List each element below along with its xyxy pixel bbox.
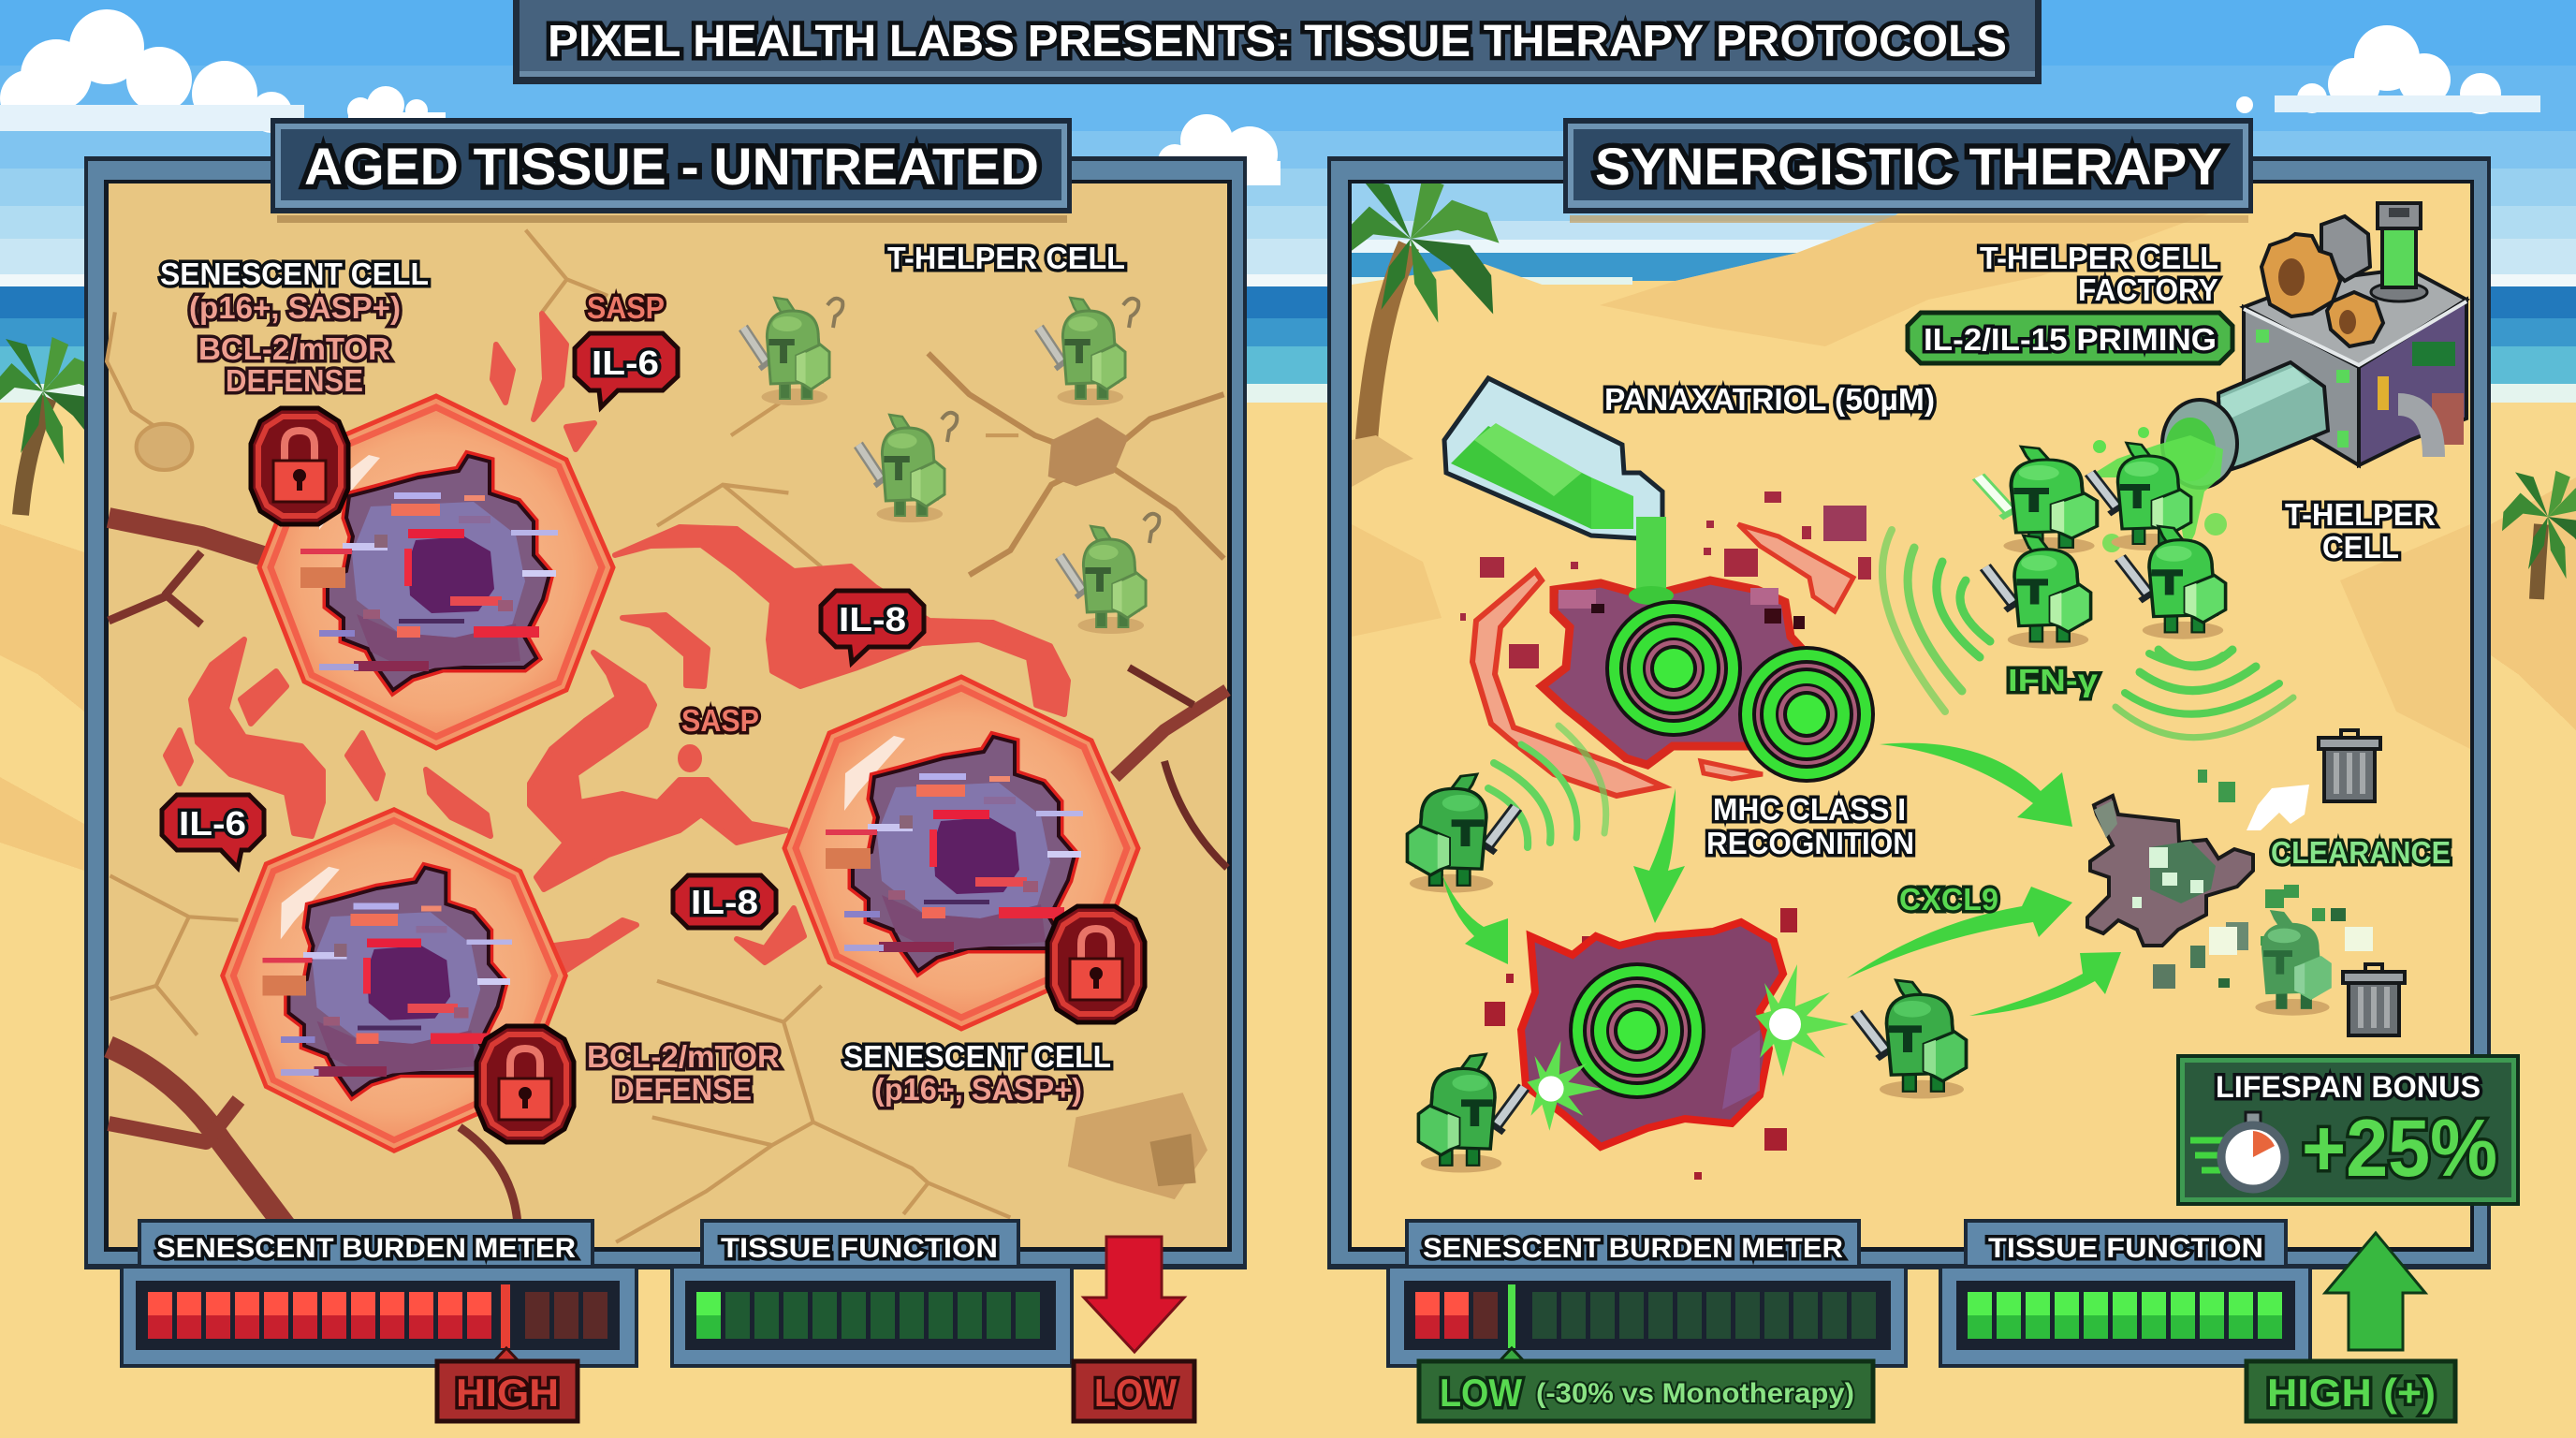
callout: lifespan bonus: +25% [2302, 1104, 2497, 1194]
dune [1352, 183, 2470, 1247]
knight E with sword right [1407, 774, 1516, 893]
meter: senescent burden, untreated: SENESCENT BURDEN METER [156, 1233, 576, 1264]
label: T-helper cell factory [1980, 241, 2218, 307]
dune shading [1352, 213, 2470, 749]
callout: lifespan bonus: LIFESPAN BONUS [2216, 1070, 2481, 1104]
grey machine part [2321, 216, 2370, 281]
label: IL-2/IL-15 priming: IL-2/IL-15 PRIMING [1924, 322, 2217, 357]
label: clearance: CLEARANCE [2271, 835, 2451, 870]
green serum tube [2371, 203, 2427, 301]
label: SASP top: SASP [587, 290, 665, 325]
arrow: knight to lower cell [1442, 875, 1508, 964]
icon: trash can lower [2343, 964, 2405, 1035]
arrow: function down [1084, 1237, 1184, 1352]
meter: tissue function, untreated [670, 1219, 1074, 1368]
label: CXCL9: CXCL9 [1899, 882, 1998, 917]
heading: synergistic therapy [1563, 118, 2253, 223]
label: BCL-2/mTOR defense bottom [587, 1039, 780, 1107]
meter: senescent burden, untreated [120, 1219, 638, 1368]
icon: panaxatriol bottle [1444, 378, 1674, 605]
knight squad [1978, 443, 2226, 649]
callout: IL-8 lower: IL-8 [691, 883, 758, 921]
label: T-helper cell: T-HELPER CELL [887, 241, 1125, 275]
arrow: function up [2325, 1233, 2425, 1350]
MHC target marker lower [1569, 962, 1705, 1099]
label: senescent cell top: DEFENSE [226, 363, 363, 398]
knight F and impact burst [1418, 1041, 1602, 1172]
label: senescent cell top: SENESCENT CELL [160, 257, 429, 291]
callout: lifespan bonus [2176, 1054, 2520, 1206]
panel: synergistic therapy [1327, 156, 2491, 1269]
burden marker [501, 1284, 510, 1348]
callout: IL-8 upper: IL-8 [839, 600, 906, 638]
label: BCL-2/mTOR defense bottom: BCL-2/mTOR [587, 1039, 780, 1074]
blood vessels [109, 518, 1227, 1245]
meter: tissue function, therapy [1939, 1219, 2312, 1368]
label: senescent cell bottom: SENESCENT CELL [843, 1039, 1111, 1074]
label: senescent cell top: BCL-2/mTOR [198, 331, 390, 366]
lock: BCL-2/mTOR defense, cell 3 [1047, 906, 1145, 1022]
callout: IL-6 upper [575, 333, 678, 407]
waves from left knight [1488, 726, 1606, 847]
label: senescent cell top [160, 257, 429, 398]
burden segments [148, 1292, 607, 1339]
factory status lights [2256, 330, 2455, 448]
palm tree inside panel [1342, 176, 1500, 487]
label: MHC class I recognition: MHC CLASS I [1713, 792, 1906, 827]
senescent cell 1 [259, 396, 613, 748]
clouds [0, 9, 2540, 185]
gears [2261, 234, 2383, 346]
knight G and impact burst [1755, 964, 1966, 1099]
burden segments [1415, 1292, 1876, 1339]
callout: IL-6 upper: IL-6 [592, 344, 659, 382]
heading: aged tissue [271, 118, 1072, 223]
meter: senescent burden, therapy: SENESCENT BURDEN METER [1423, 1233, 1843, 1264]
lock: BCL-2/mTOR defense, cell 2 [476, 1026, 574, 1142]
label: BCL-2/mTOR defense bottom: DEFENSE [613, 1072, 752, 1107]
callout: IL-6 lower: IL-6 [179, 804, 246, 843]
burden marker [1508, 1284, 1515, 1348]
function segments [696, 1292, 1040, 1339]
badge: HIGH [437, 1348, 578, 1421]
callout: IL-6 lower [162, 795, 264, 868]
arrow: knight to clearance [1969, 952, 2121, 1016]
label: senescent cell bottom: (p16+, SASP+) [874, 1072, 1082, 1107]
heading: synergistic therapy: SYNERGISTIC THERAPY [1595, 137, 2222, 196]
SASP inflammatory flow [166, 314, 1068, 971]
senescent cell 3 [784, 677, 1138, 1029]
green serum cloud [2087, 427, 2227, 552]
badge: HIGH: HIGH [456, 1371, 559, 1415]
callout: IL-8 upper [821, 591, 924, 663]
side pipes [2432, 393, 2464, 445]
label: MHC class I recognition: RECOGNITION [1706, 826, 1914, 860]
badge: LOW red [1074, 1361, 1194, 1421]
label: T-helper cell: CELL [2322, 530, 2399, 565]
lock: BCL-2/mTOR defense, cell 1 [251, 408, 348, 524]
meter: senescent burden, therapy [1386, 1219, 1908, 1368]
idle T-helper knights [743, 298, 1159, 634]
title banner: PIXEL HEALTH LABS PRESENTS: TISSUE THERAPY PROTOCOLS [548, 17, 2007, 66]
badge: HIGH (+): HIGH (+) [2267, 1371, 2436, 1415]
damaged senescent cell lower [1521, 922, 1783, 1147]
title banner [513, 0, 2042, 84]
debris near lower cell [1485, 908, 1797, 1180]
icon: T-helper cell factory [2162, 203, 2466, 488]
callout: IL-8 lower [673, 875, 776, 928]
cracked tissue [107, 230, 1223, 1242]
badge: LOW red: LOW [1094, 1371, 1177, 1415]
meter: tissue function, therapy: TISSUE FUNCTION [1988, 1233, 2263, 1264]
label: MHC class I recognition [1706, 792, 1914, 860]
label: senescent cell bottom [843, 1039, 1111, 1107]
MHC target markers upper [1605, 600, 1875, 783]
label: T-helper cell factory: FACTORY [2078, 272, 2218, 307]
arrow: down to lower cell [1633, 788, 1685, 923]
panel: aged tissue, untreated [84, 156, 1247, 1269]
badge: HIGH (+) [2247, 1361, 2455, 1421]
label: T-helper cell: T-HELPER [2285, 497, 2436, 532]
badge: LOW -30% vs Monotherapy: (-30% vs Monotherapy) [1536, 1378, 1854, 1409]
badge: LOW -30% vs Monotherapy: LOW [1440, 1371, 1522, 1415]
panel frame [1327, 156, 2491, 1269]
heading: aged tissue: AGED TISSUE - UNTREATED [304, 137, 1039, 196]
label: T-helper cell [2285, 497, 2436, 565]
panel frame [84, 156, 1247, 1269]
dissolving knight [2234, 910, 2332, 1016]
senescent cell 2 [223, 810, 565, 1151]
icon: stopwatch [2190, 1112, 2285, 1189]
label: IFN-gamma: IFN-γ [2008, 663, 2099, 697]
badge: LOW -30% vs Monotherapy [1419, 1348, 1873, 1421]
arrow: to clearance upper [1880, 743, 2072, 827]
arrow: white clearance [2247, 785, 2309, 830]
icon: trash can upper [2319, 730, 2380, 801]
function segments [1968, 1292, 2282, 1339]
arrow: CXCL9 [1847, 887, 2072, 978]
label: Panaxatriol: PANAXATRIOL (50µM) [1604, 382, 1935, 417]
meter: tissue function, untreated: TISSUE FUNCTION [721, 1233, 998, 1264]
output pipe [2218, 362, 2328, 473]
palm tree: left shore [0, 337, 110, 515]
damaged senescent cell upper [1472, 524, 1853, 796]
dissolving cell: clearance [2087, 770, 2373, 989]
label: senescent cell top: (p16+, SASP+) [189, 290, 401, 325]
IFN-gamma signal waves toward cell [1882, 530, 1990, 712]
red debris [1460, 492, 1871, 668]
label: IL-2/IL-15 priming [1908, 313, 2232, 363]
label: SASP centre: SASP [681, 703, 759, 738]
label: T-helper cell factory: T-HELPER CELL [1980, 241, 2218, 275]
palm tree: right shore [2502, 471, 2576, 599]
signal waves below knights [2115, 650, 2293, 738]
